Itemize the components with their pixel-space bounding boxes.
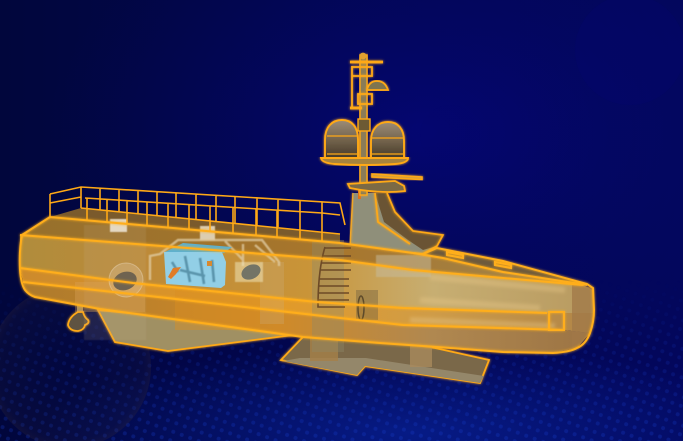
- line three: [23, 282, 563, 330]
- radome platform: [321, 158, 408, 165]
- hull body: [20, 217, 594, 353]
- right radome: [371, 122, 404, 158]
- deck hatch aft: [447, 252, 463, 258]
- blue engine block: [164, 243, 232, 288]
- mid band: [20, 268, 594, 333]
- radome bands: [327, 136, 403, 154]
- line two: [20, 268, 547, 313]
- main band: [20, 235, 594, 313]
- upper band: [20, 217, 587, 285]
- lower band: [23, 282, 590, 353]
- deck hatch forward: [495, 262, 511, 268]
- white crate aft: [110, 219, 127, 232]
- aft deck surface: [50, 208, 340, 243]
- bow tip shade: [553, 283, 594, 353]
- hull outlines: [20, 217, 594, 353]
- mast pole: [358, 53, 370, 195]
- deck edge: [413, 253, 587, 285]
- lower platform: [348, 181, 405, 192]
- stern propeller: [68, 305, 89, 331]
- outer hull: [20, 217, 594, 353]
- bow deck: [423, 248, 587, 284]
- tan support frame: [150, 240, 279, 280]
- central column: [312, 240, 344, 352]
- aft compartments: [75, 225, 284, 340]
- forward generator: [235, 261, 263, 283]
- aft generator: [109, 263, 143, 297]
- aft deck railing: [50, 187, 345, 241]
- interior machinery: [75, 219, 431, 352]
- white crate mid: [200, 226, 215, 240]
- soft highlight streaks: [410, 277, 565, 326]
- lower gun arm: [372, 174, 422, 180]
- bow hatch: [549, 312, 564, 330]
- skeg: [98, 310, 293, 351]
- line one: [20, 235, 583, 285]
- tower base: [350, 190, 443, 254]
- small radome: [367, 81, 388, 90]
- mast and antenna tower: [321, 53, 443, 254]
- left radome: [325, 120, 358, 158]
- stairway: [318, 247, 351, 307]
- upper yard arms: [350, 62, 383, 108]
- foil keel: [281, 337, 489, 383]
- amidships equipment: [356, 255, 431, 320]
